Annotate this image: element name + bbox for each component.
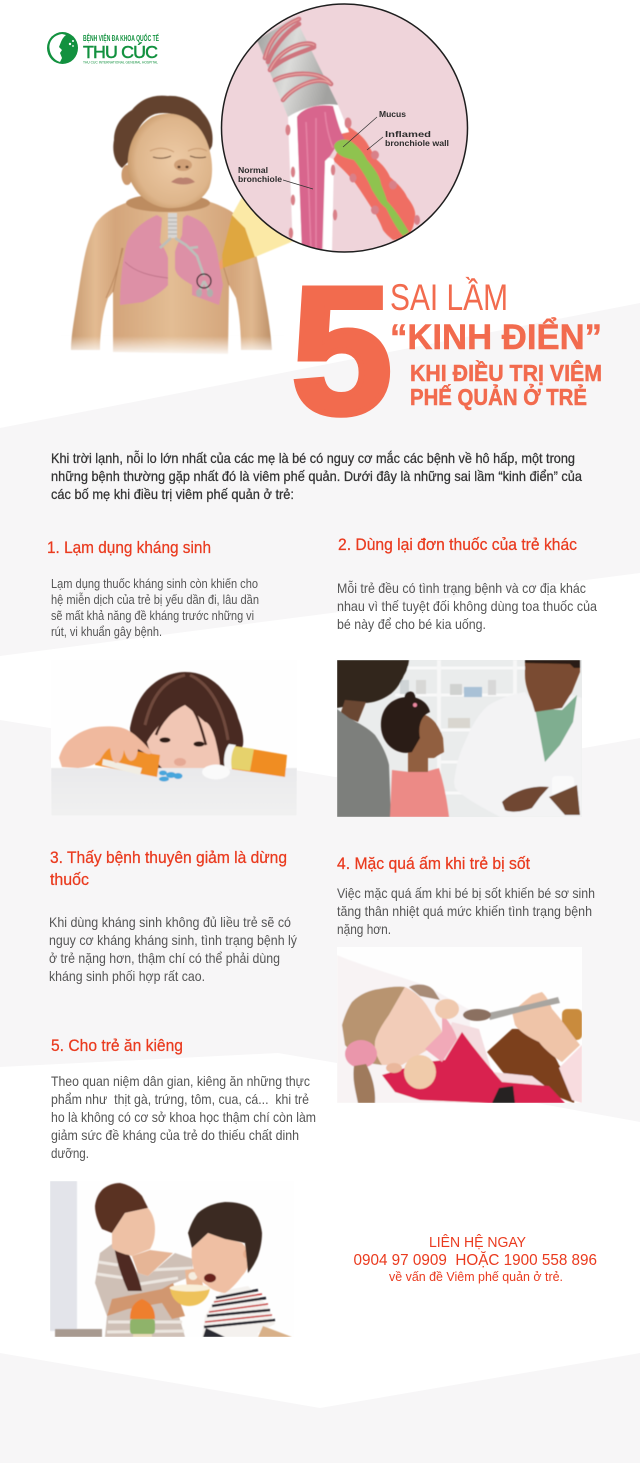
panel: mistake 3: nguy cơ kháng kháng sinh, tình trạng bệnh lý: [49, 933, 297, 948]
normal bronchiole lumen: [297, 105, 345, 252]
baby neck shadow: [126, 194, 210, 212]
lower fist: [404, 1055, 436, 1089]
logo: Thu Cuc hospital: THU CÚC: [83, 41, 158, 62]
mother hair tail: [113, 1240, 142, 1291]
panel: mistake 4: [337, 854, 595, 1103]
text: mistake 5 body: giảm sức đề kháng của trẻ do thiếu chất dinh: [51, 1128, 299, 1143]
mother hair: [337, 660, 409, 708]
mother grey top: [337, 709, 391, 817]
marker circle on lung: [197, 274, 211, 288]
photo: child with spilled pills: [52, 671, 297, 804]
illustration: baby with lungs: [60, 96, 296, 363]
medicine bottle: [492, 1086, 515, 1103]
photo: mother feeding crying toddler: [50, 1181, 294, 1337]
diagram labels: [238, 109, 449, 184]
panel: mistake 5: 5. Cho trẻ ăn kiêng: [51, 1036, 183, 1055]
grey airway tube: [257, 17, 338, 117]
text: mistake 2 body: [337, 580, 597, 632]
pharmacist coat: [454, 692, 582, 817]
table: [51, 768, 297, 816]
baby torso and arms: [71, 200, 272, 354]
trachea and bronchi: [160, 213, 213, 297]
diagram labels: Inflamed: [385, 129, 431, 139]
braid: [353, 1064, 375, 1103]
toddler hand: [185, 1268, 203, 1288]
bowl: [170, 1287, 210, 1306]
mother shirt: [95, 1244, 193, 1337]
scarf: [425, 1014, 457, 1062]
diagram labels: bronchiole: [238, 174, 282, 184]
baby hair: [113, 96, 213, 168]
left lung: [120, 215, 168, 305]
mother chest: [132, 1250, 173, 1276]
panel: mistake 3: Khi dùng kháng sinh không đủ liều trẻ sẽ có: [49, 915, 291, 930]
plate: [55, 1329, 102, 1337]
callout: contact: 0904 97 0909 HOẶC 1900 558 896: [354, 1250, 597, 1269]
girl face: [375, 987, 442, 1065]
white airway walls: [288, 104, 349, 252]
mother hair: [95, 1183, 148, 1233]
right lung: [175, 215, 223, 305]
text: mistake 4 body: Việc mặc quá ấm khi bé bị sốt khiến bé sơ sinh: [337, 886, 595, 901]
photo: pharmacist with mother and girl: [337, 660, 582, 817]
airway spiral rings: [265, 19, 331, 100]
text: mistake 2 body: Mỗi trẻ đều có tình trạng bệnh và cơ địa khác: [337, 580, 586, 596]
text: mistake 5 body: ho là không có cơ sở khoa học thậm chí còn làm: [51, 1110, 316, 1125]
text: mistake 1 body: Lạm dụng thuốc kháng sinh còn khiến cho: [51, 576, 258, 591]
title: [292, 250, 602, 452]
toddler hair: [188, 1202, 262, 1273]
intro paragraph: [51, 450, 582, 502]
girl red top: [382, 1032, 565, 1103]
text: mistake 5 body: phẩm như thịt gà, trứng, tôm, cua, cá... khi trẻ: [51, 1092, 309, 1107]
diagram leader lines: [283, 117, 383, 189]
logo: Thu Cuc hospital: BỆNH VIỆN ĐA KHOA QUỐC TẾ: [83, 33, 159, 43]
wall cells: [286, 118, 420, 238]
girl neck and face: [408, 714, 444, 772]
toddler shirt: [202, 1286, 275, 1337]
mother face: [112, 1208, 155, 1256]
panel: mistake 3: kháng sinh phối hợp rất cao.: [49, 969, 205, 984]
title: SAI LẦM: [390, 276, 508, 318]
pillow: [337, 955, 470, 1103]
diagram labels: Mucus: [379, 109, 406, 119]
child face: [147, 705, 220, 768]
text: mistake 5 body: [51, 1074, 316, 1161]
girl hair: [342, 987, 405, 1065]
logo: Thu Cuc hospital: [47, 32, 159, 64]
girl dress: [390, 768, 449, 817]
panel: mistake 2: [337, 535, 597, 817]
upper fist: [435, 999, 459, 1019]
gold plush: [562, 1009, 582, 1040]
panel: mistake 1: [47, 538, 297, 816]
title: KHI ĐIỀU TRỊ VIÊM: [410, 359, 602, 386]
photo: sick girl being given medicine: [338, 984, 582, 1103]
heading: mistake 3: 3. Thấy bệnh thuyên giảm là dừng: [50, 848, 287, 867]
drink cup: [130, 1299, 155, 1319]
text: mistake 1 body: sẽ mất khả năng đề kháng trước những vi: [51, 608, 254, 623]
hair bun: [409, 984, 440, 1000]
right pill bottle: [224, 744, 287, 777]
callout: contact: LIÊN HỆ NGAY: [429, 1234, 526, 1251]
text: mistake 4 body: tăng thân nhiệt quá mức khiến tình trạng bệnh: [337, 904, 592, 919]
hair bow: [345, 1040, 377, 1068]
pharmacy shelves: [395, 660, 525, 800]
beam: yellow highlight: [232, 197, 296, 257]
text: mistake 2 body: bé này để cho bé kia uống.: [337, 617, 486, 632]
panel: mistake 2: 2. Dùng lại đơn thuốc của trẻ khác: [338, 535, 577, 554]
intro paragraph: những bệnh thường gặp nhất đó là viêm phế quản. Dưới đây là những sai lầm “kinh điển” của: [51, 468, 582, 484]
logo: Thu Cuc hospital: THU CUC INTERNATIONAL GENERAL HOSPITAL: [83, 60, 158, 64]
toddler face: [192, 1233, 250, 1293]
pharmacist hands: [502, 787, 549, 812]
diagram labels: bronchiole wall: [385, 138, 449, 148]
heading: mistake 3: [50, 848, 287, 889]
left pill bottle: [95, 745, 160, 777]
mother neck: [340, 700, 366, 722]
panel: mistake 1: 1. Lạm dụng kháng sinh: [47, 538, 211, 557]
blue pills: [159, 770, 182, 782]
chair back: [258, 1326, 292, 1337]
baby face: [128, 114, 212, 208]
green mucus: [334, 140, 409, 236]
inset circle: bronchiole diagram: [222, 4, 468, 252]
text: mistake 1 body: rút, vi khuẩn gây bệnh.: [51, 624, 162, 639]
child hair: [130, 672, 243, 768]
intro paragraph: các bố mẹ khi điều trị viêm phế quản ở trẻ:: [51, 486, 294, 502]
diagram labels: Normal: [238, 165, 268, 175]
mother arm: [107, 1283, 185, 1319]
adult cuff: [559, 1045, 582, 1103]
heading: mistake 3: thuốc: [50, 870, 89, 889]
girl hair: [381, 697, 430, 753]
baby ear: [122, 165, 132, 185]
panel: mistake 3: [49, 848, 297, 984]
bottle cap: [202, 764, 230, 780]
brown teddy: [487, 1029, 576, 1103]
spoon: [488, 997, 560, 1020]
child arm and hand: [59, 726, 152, 768]
text: mistake 4 body: [337, 886, 595, 937]
callout: contact: về vấn đề Viêm phế quản ở trẻ.: [389, 1269, 563, 1284]
title: “KINH ĐIỂN”: [390, 317, 602, 357]
panel: mistake 4: 4. Mặc quá ấm khi trẻ bị sốt: [337, 854, 530, 873]
title numeral 5: 5: [292, 250, 392, 452]
panel: mistake 5: [50, 1036, 316, 1337]
callout: contact: [354, 1234, 597, 1284]
intro paragraph: Khi trời lạnh, nỗi lo lớn nhất của các mẹ là bé có nguy cơ mắc các bệnh về hô hấp, một trong: [51, 450, 575, 466]
medicine bottle: [552, 776, 574, 796]
text: mistake 4 body: nặng hơn.: [337, 922, 391, 937]
adult hand: [512, 992, 580, 1062]
title: PHẾ QUẢN Ở TRẺ: [410, 382, 587, 410]
salmon inflamed wall: [333, 123, 415, 240]
pharmacist shirt: [535, 695, 577, 762]
text: mistake 2 body: nhau vì thế tuyệt đối không dùng toa thuốc của: [337, 599, 597, 614]
pharmacist head: [525, 660, 580, 712]
text: mistake 1 body: hệ miễn dịch của trẻ bị yếu dần đi, lâu dần: [51, 592, 259, 607]
icon: logo circle: [47, 32, 78, 64]
pink sleeve: [444, 1022, 545, 1103]
text: mistake 1 body: [51, 576, 259, 639]
text: mistake 5 body: Theo quan niệm dân gian, kiêng ăn những thực: [51, 1074, 310, 1089]
panel: mistake 3: ở trẻ nặng hơn, thậm chí có thể phải dùng: [49, 951, 280, 966]
text: mistake 5 body: dưỡng.: [51, 1146, 89, 1161]
